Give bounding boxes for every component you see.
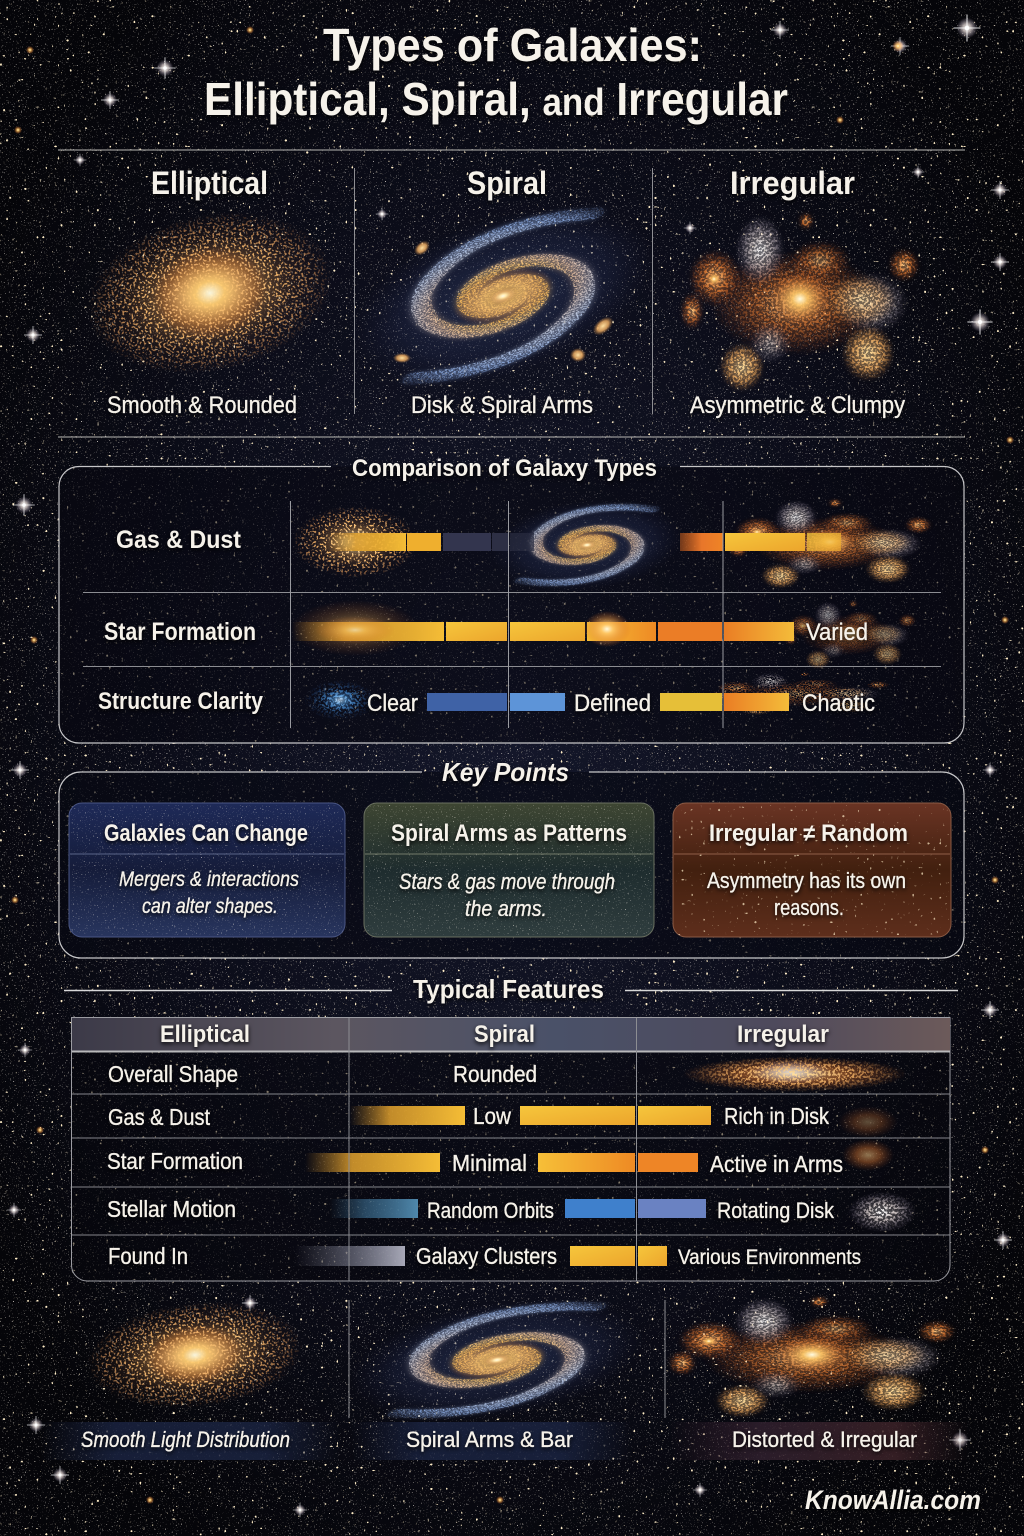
panel: key points xyxy=(59,757,964,958)
card: galaxies can change xyxy=(69,803,345,937)
row: structure clarity: Chaotic xyxy=(802,690,875,717)
bar: star formation xyxy=(292,611,794,647)
row: star formation: Active in Arms xyxy=(710,1151,843,1177)
title: Elliptical, Spiral, and Irregular xyxy=(204,73,788,125)
row: overall shape: Overall Shape xyxy=(108,1061,238,1087)
heading: typical features: Typical Features xyxy=(413,974,604,1004)
bar: gas and dust xyxy=(329,533,841,551)
caption: Smooth & Rounded: Smooth & Rounded xyxy=(107,392,297,419)
row: star formation: Varied xyxy=(806,619,868,646)
heading: key points: Key Points xyxy=(442,757,569,787)
card: irregular is not random: Irregular ≠ Random xyxy=(709,820,908,847)
heading: Spiral: Spiral xyxy=(467,165,547,201)
heading: Irregular: Irregular xyxy=(730,165,855,201)
row: stellar motion: Rotating Disk xyxy=(717,1198,835,1223)
card: galaxies can change: Galaxies Can Change xyxy=(104,820,308,847)
heading: Elliptical: Elliptical xyxy=(151,165,268,201)
table header: Elliptical xyxy=(160,1021,250,1048)
galaxy image: spiral xyxy=(331,174,675,418)
row: found in: Various Environments xyxy=(678,1246,861,1269)
card: galaxies can change: Mergers & interactions xyxy=(119,868,299,891)
row: overall shape xyxy=(108,1056,907,1092)
caption: Asymmetric & Clumpy: Asymmetric & Clumpy xyxy=(690,392,905,419)
row: structure clarity: Clear xyxy=(367,690,418,717)
panel: comparison of galaxy types xyxy=(59,455,964,743)
table header: Irregular xyxy=(737,1021,829,1048)
row: structure clarity xyxy=(98,672,889,720)
card: spiral arms as patterns xyxy=(364,803,654,937)
table header xyxy=(72,1018,950,1052)
row: stellar motion: Random Orbits xyxy=(427,1198,554,1223)
row: star formation xyxy=(107,1139,894,1177)
heading: comparison: Comparison of Galaxy Types xyxy=(352,455,657,482)
row: found in xyxy=(108,1243,861,1269)
row: found in: Galaxy Clusters xyxy=(416,1243,557,1269)
panel: spiral overview xyxy=(331,165,675,419)
card: irregular is not random xyxy=(673,803,951,937)
caption: smooth light distribution: Smooth Light Distribution xyxy=(81,1427,290,1452)
table: typical features xyxy=(72,1018,950,1281)
galaxy image: irregular xyxy=(681,213,919,391)
title xyxy=(204,19,788,125)
row: overall shape: Rounded xyxy=(453,1061,537,1087)
row: star formation xyxy=(104,600,915,668)
background galaxies xyxy=(293,491,931,599)
galaxy image: elliptical xyxy=(72,191,348,395)
panel: elliptical overview xyxy=(72,165,348,419)
bar: structure clarity xyxy=(427,693,789,711)
card: spiral arms as patterns: Stars & gas move through xyxy=(399,869,615,894)
card: spiral arms as patterns: the arms. xyxy=(465,896,547,921)
panel: spiral footer xyxy=(342,1280,652,1460)
row: gas and dust xyxy=(108,1103,898,1138)
card: irregular is not random: reasons. xyxy=(774,895,844,920)
row: gas and dust: Rich in Disk xyxy=(724,1103,829,1129)
row: star formation: Star Formation xyxy=(104,618,256,646)
card: spiral arms as patterns: Spiral Arms as Patterns xyxy=(391,820,627,847)
title: Types of Galaxies: xyxy=(323,19,702,71)
row: gas and dust xyxy=(116,491,931,599)
panel: irregular overview xyxy=(681,165,919,419)
galaxy image: spiral with bar xyxy=(342,1280,652,1440)
card: galaxies can change: can alter shapes. xyxy=(142,895,278,918)
row: gas and dust: Gas & Dust xyxy=(116,526,242,554)
row: structure clarity: Structure Clarity xyxy=(98,688,264,715)
caption: spiral arms and bar: Spiral Arms & Bar xyxy=(406,1427,573,1452)
row: star formation: Minimal xyxy=(452,1150,527,1176)
panel: irregular footer xyxy=(669,1296,970,1460)
brand: KnowAllia.com: KnowAllia.com xyxy=(805,1485,981,1515)
table header: Spiral xyxy=(474,1021,535,1048)
caption: distorted and irregular: Distorted & Irregular xyxy=(732,1427,917,1452)
row: structure clarity: Defined xyxy=(574,690,651,717)
caption: Disk & Spiral Arms: Disk & Spiral Arms xyxy=(411,392,593,419)
galaxy image: distorted xyxy=(669,1296,955,1417)
row: found in: Found In xyxy=(108,1243,188,1269)
panel: elliptical footer xyxy=(40,1292,340,1460)
row: star formation: Star Formation xyxy=(107,1148,243,1174)
row: gas and dust: Gas & Dust xyxy=(108,1104,211,1130)
row: stellar motion: Stellar Motion xyxy=(107,1196,236,1222)
card: irregular is not random: Asymmetry has its own xyxy=(707,868,906,893)
galaxy image: smooth light xyxy=(82,1292,308,1418)
row: stellar motion xyxy=(107,1192,916,1232)
row: gas and dust: Low xyxy=(473,1103,511,1129)
